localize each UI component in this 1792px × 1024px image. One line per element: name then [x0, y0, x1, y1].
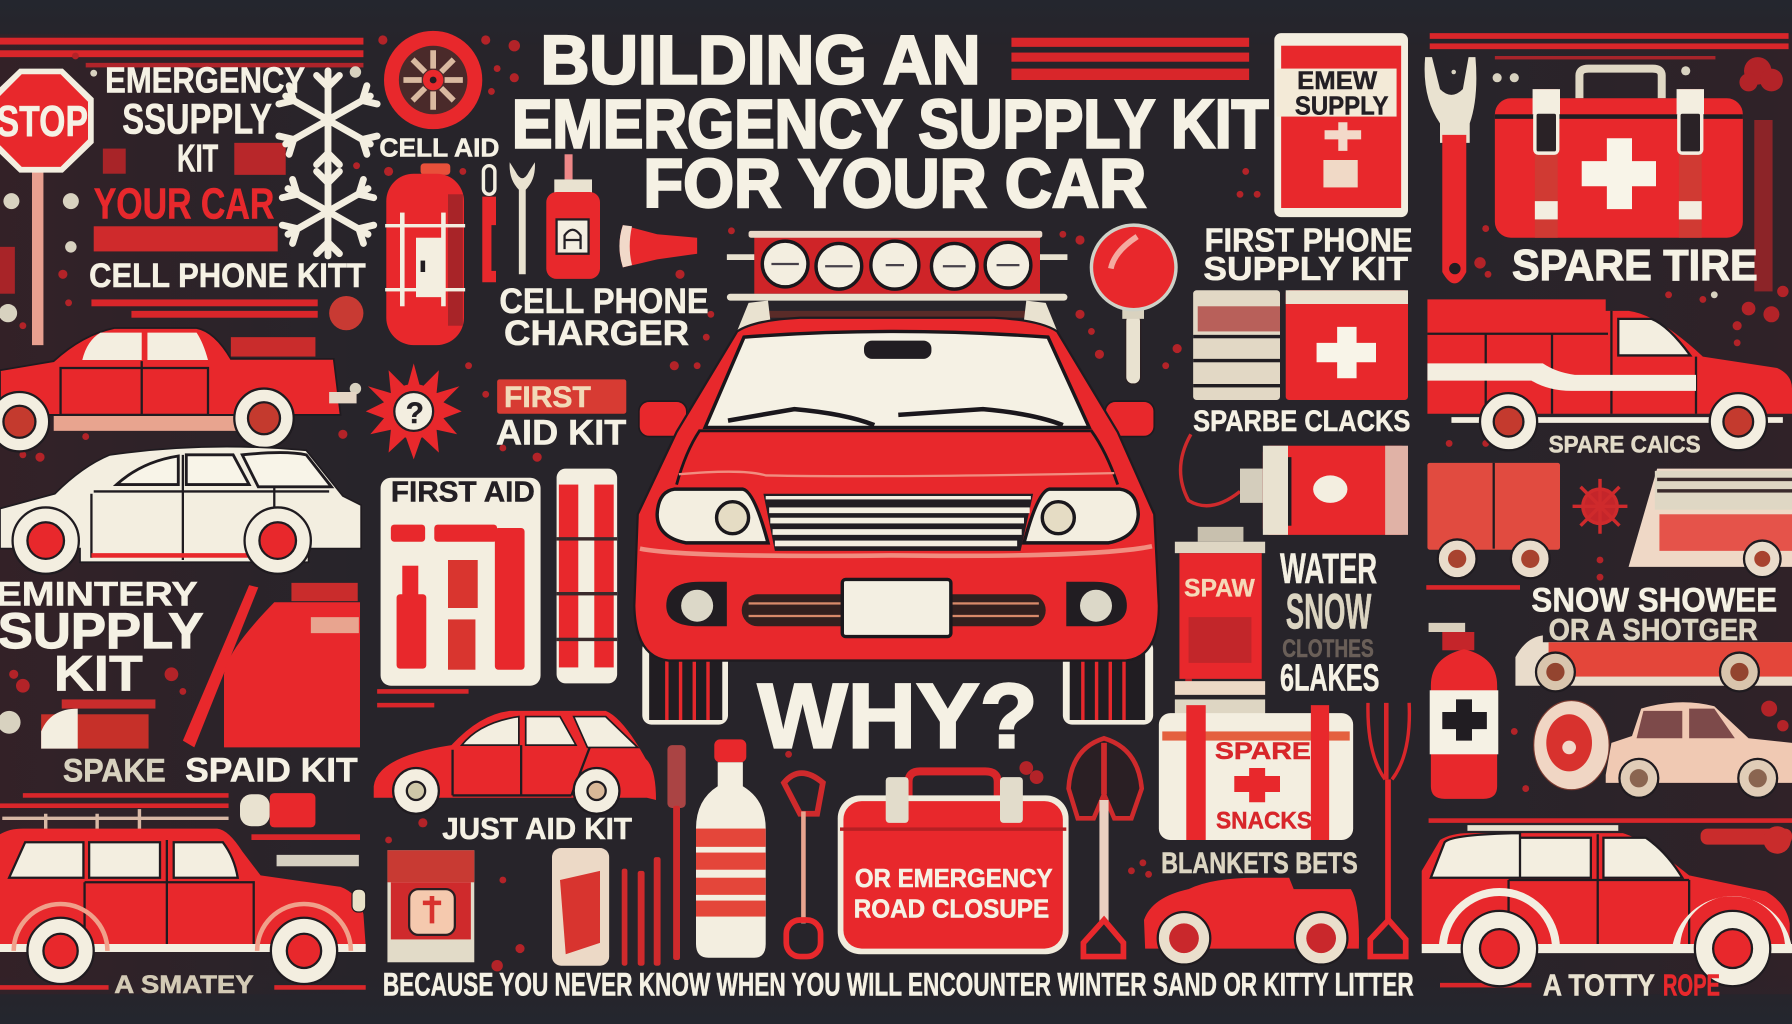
text: first phone supply kit: FIRST PHONE: [1205, 222, 1413, 259]
icon: red globe: [329, 296, 363, 330]
icon: extinguisher with black cross: [1429, 623, 1498, 799]
icon: emergency supply book: [1274, 33, 1408, 217]
icon: red suv: [0, 809, 366, 984]
icon: pink sedan: [1606, 702, 1792, 798]
icon: wheel: [379, 31, 499, 163]
grille: [763, 494, 1033, 551]
icon: wrench: [510, 162, 535, 274]
text: first aid kit tag: FIRST: [504, 381, 591, 414]
icon: pale van: [1629, 469, 1792, 577]
icon: wrench large: [1425, 57, 1476, 283]
icon: flashlight: [619, 225, 697, 267]
icon: red rake: [1368, 703, 1409, 957]
icon: snowflakes: [279, 71, 377, 256]
icon: emergency supply book: SUPPLY: [1295, 90, 1389, 120]
icon: red tow hook: [1701, 826, 1792, 854]
text: spare spaid kit: SPAID KIT: [185, 752, 358, 790]
icon: blankets and first aid box: [1193, 290, 1408, 400]
text: cell phone charger: CHARGER: [504, 313, 689, 353]
text: first phone supply kit: [1203, 222, 1413, 288]
icon: faded red car: [1515, 635, 1792, 691]
icon: spam can: [1175, 527, 1265, 714]
icon: snow shovel: [1069, 738, 1142, 957]
text: water snow clothes flakes: SNOW: [1286, 583, 1372, 640]
text: emintery supply kit: EMINTERY: [0, 576, 198, 614]
text: first phone supply kit: SUPPLY KIT: [1203, 251, 1408, 288]
icon: central red car: [634, 231, 1159, 725]
car body: [634, 318, 1159, 661]
title: FOR YOUR CAR: [643, 145, 1146, 222]
icon: spare snacks kit: SNACKS: [1216, 808, 1312, 835]
icon: small red tool: [482, 166, 496, 282]
icon: spam can: SPAW: [1184, 575, 1255, 603]
text: why: WHY?: [758, 665, 1038, 767]
text: sparbe clacks: SPARBE CLACKS: [1193, 405, 1410, 438]
icon: red emergency bag: [838, 771, 1069, 954]
icon: stop sign: STOP: [0, 98, 88, 146]
icon: wheel: CELL AID: [379, 133, 499, 163]
icon: small first aid pouch: [387, 850, 474, 962]
icon: roof light and label: [240, 793, 359, 866]
icon: red emergency bag: OR EMERGENCY: [855, 863, 1053, 893]
text: snow shower or a shotger: [1531, 581, 1777, 647]
title: [512, 21, 1269, 222]
text: spare spaid kit: SPAKE: [63, 753, 166, 789]
icon: red roadster: [1144, 878, 1359, 965]
icon: red pickup truck: [0, 328, 357, 451]
text: spare caics: SPARE CAICS: [1549, 432, 1701, 459]
text: spare spaid kit: [63, 752, 358, 790]
icon: red ambulance truck: [1427, 299, 1792, 450]
panel: first aid board: FIRST AID: [391, 477, 535, 509]
text: cell phone charger: CELL PHONE: [499, 281, 709, 321]
icon: red wagon car: [1422, 825, 1792, 986]
icon: water bottle: [696, 739, 766, 958]
icon: red shovel: [784, 773, 823, 957]
text: first aid kit tag: AID KIT: [496, 413, 627, 453]
icon: red gas can: [183, 583, 360, 747]
headlights: [657, 489, 1138, 543]
text: water snow clothes flakes: CLOTHES: [1282, 635, 1374, 663]
text block: emergency supply kit, top left: SSUPPLY: [122, 96, 272, 143]
icon: medicine bottle: [546, 154, 600, 279]
text block: emergency supply kit, top left: [89, 60, 366, 295]
text block: emergency supply kit, top left: CELL PHONE KITT: [89, 257, 366, 295]
icon: strip of bandages: [557, 469, 617, 683]
text block: emergency supply kit, top left: KIT: [177, 137, 218, 180]
icon: battery canister with cable: [1181, 434, 1408, 535]
mirrors: [639, 401, 1154, 437]
title: BUILDING AN: [541, 21, 981, 98]
rear wheels: [642, 640, 1153, 725]
roof rack with lights: [727, 231, 1067, 334]
decorative pale specks: [0, 66, 1718, 734]
text: water snow clothes flakes: [1280, 545, 1379, 698]
text: emintery supply kit: SUPPLY: [0, 602, 203, 659]
icon: red burst: [1573, 479, 1627, 534]
text: water snow clothes flakes: 6LAKES: [1280, 656, 1379, 698]
icon: small red sedan: [374, 711, 656, 814]
icon: warning sun: [366, 363, 462, 459]
icon: fire extinguisher with straps: [385, 163, 465, 345]
text: spare tire: SPARE TIRE: [1512, 242, 1758, 290]
icon: slim tools: [622, 745, 686, 966]
icon: pale red utility truck: [1427, 463, 1560, 578]
icon: stop sign: [0, 69, 94, 345]
icon: warning sun: ?: [406, 397, 424, 430]
text: first aid kit tag: [496, 379, 627, 453]
text: a smatey: A SMATEY: [114, 971, 254, 999]
text block: emergency supply kit, top left: YOUR CAR: [94, 180, 274, 228]
bumper: [640, 546, 1152, 556]
hood line: [677, 431, 1118, 485]
icon: round emblem: [1534, 701, 1609, 790]
text: snow shower or a shotger: OR A SHOTGER: [1549, 612, 1758, 647]
icon: red ball on stick: [1091, 225, 1176, 384]
text: emintery supply kit: KIT: [54, 644, 143, 701]
icon: large first aid case: [1495, 69, 1743, 238]
icon: red emergency bag: ROAD CLOSUPE: [854, 894, 1049, 924]
text: cell phone charger: [499, 281, 709, 353]
text: snow shower or a shotger: SNOW SHOWEE: [1531, 581, 1777, 619]
icon: red patterned card: [552, 848, 609, 966]
title: EMERGENCY SUPPLY KIT: [512, 85, 1269, 162]
text block: emergency supply kit, top left: EMERGENCY: [105, 60, 305, 101]
text: a totty rope: A TOTTY: [1543, 967, 1655, 1002]
text: blankets bets: BLANKETS BETS: [1161, 847, 1358, 880]
icon: spare snacks kit: [1159, 705, 1353, 840]
panel: first aid board: [381, 477, 541, 686]
text: a totty rope: ROPE: [1663, 967, 1720, 1002]
text: just aid kit: JUST AID KIT: [442, 811, 632, 846]
icon: emergency supply book: EMEW: [1297, 67, 1377, 95]
text: emintery supply kit: [0, 576, 203, 701]
icon: white station wagon: [0, 447, 361, 574]
windshield: [705, 331, 1089, 427]
icon: spare snacks kit: SPARE: [1215, 738, 1311, 765]
text: water snow clothes flakes: WATER: [1280, 545, 1377, 592]
fog lights and lower grille: [666, 582, 1127, 626]
icon: box with blanket: [41, 699, 155, 749]
license plate: [842, 579, 951, 637]
